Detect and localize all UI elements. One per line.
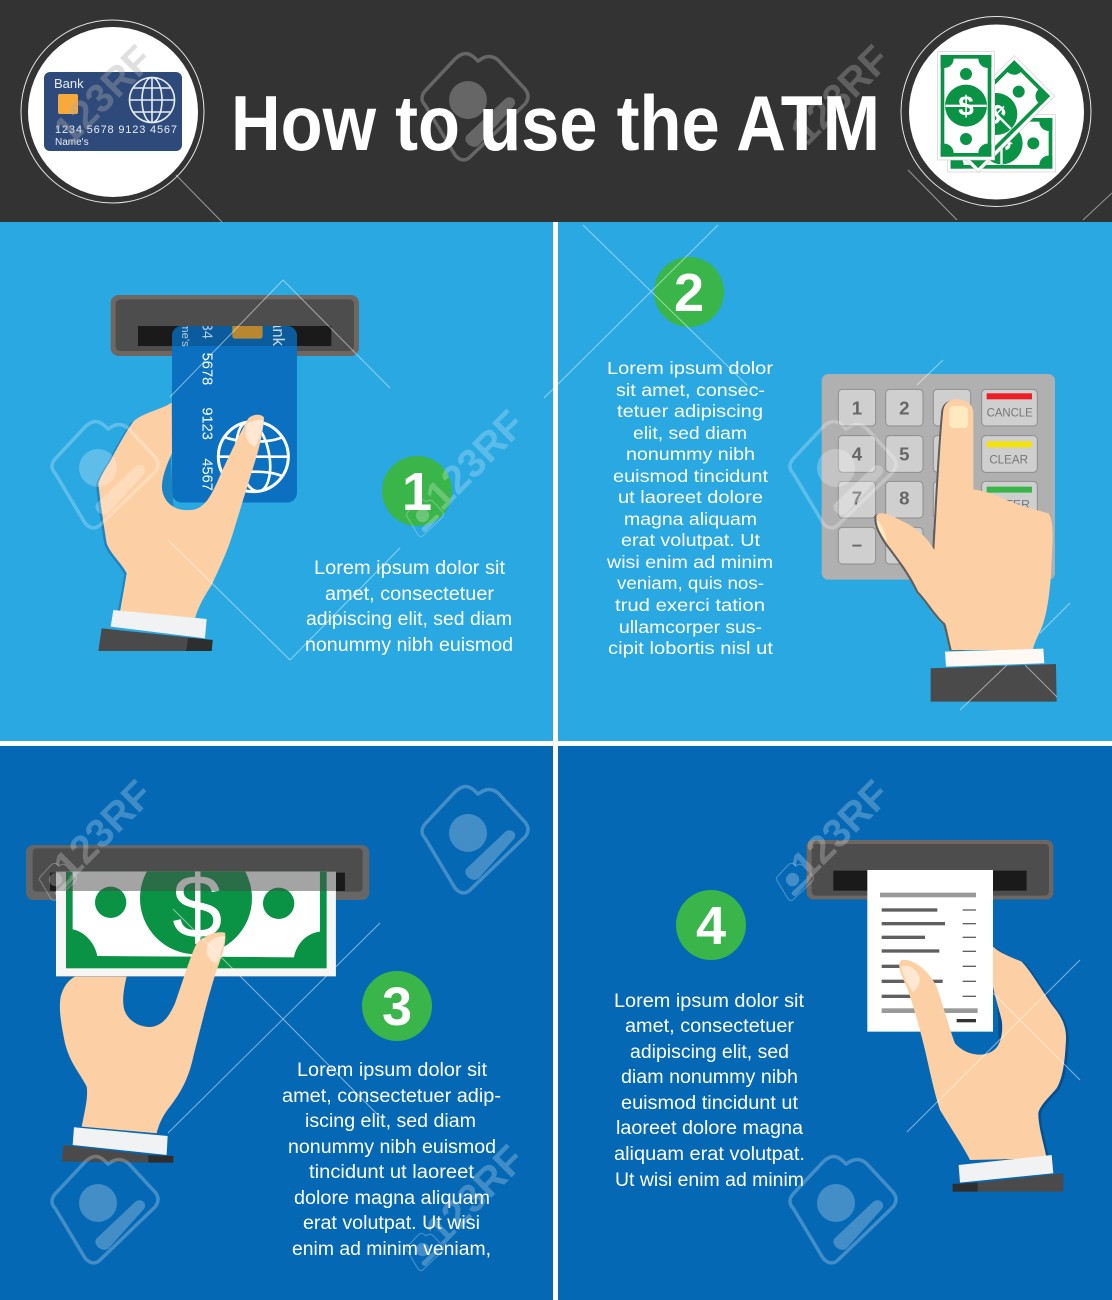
- step 2 text: Lorem ipsum dolor: [607, 358, 773, 378]
- step 4 text: adipiscing elit, sed: [630, 1042, 789, 1063]
- step 3 text: enim ad minim veniam,: [292, 1239, 491, 1260]
- step 1 text: Lorem ipsum dolor sit: [314, 558, 506, 579]
- step 2 text: veniam, quis nos-: [617, 573, 764, 593]
- step 2 text: nonummy nibh: [626, 444, 755, 464]
- step 1 number badge: 1: [402, 462, 432, 522]
- icon: credit card badge: [21, 20, 204, 203]
- step 2 text: elit, sed diam: [633, 423, 747, 443]
- watermark: header left 123RF: 123RF: [45, 37, 161, 153]
- step 3 text: amet, consectetuer adip-: [282, 1086, 501, 1107]
- step 2 illustration: keypad and pressing hand: 1: [852, 397, 862, 418]
- step 3 text: tincidunt ut laoreet: [309, 1162, 475, 1183]
- step 2 illustration: keypad and pressing hand: CANCLE: [987, 406, 1033, 420]
- step 4 text: diam nonummy nibh: [621, 1067, 798, 1088]
- step 4 text: Lorem ipsum dolor sit: [614, 991, 805, 1012]
- watermark overlay logos and text: 123RF: [782, 772, 898, 888]
- step 2 illustration: keypad and pressing hand: ENTER: [988, 497, 1030, 511]
- panel: step 3: [0, 746, 553, 1300]
- step 3 text: iscing elit, sed diam: [305, 1111, 476, 1132]
- step 4 text: aliquam erat volutpat.: [614, 1144, 805, 1165]
- watermark overlay logos and text: 123RF: [417, 402, 533, 518]
- step 2 text: [606, 358, 773, 658]
- step 2 text: wisi enim ad minim: [606, 552, 773, 572]
- step 2 text: ut laoreet dolore: [618, 487, 763, 507]
- step 2 illustration: keypad and pressing hand: 5: [899, 443, 910, 464]
- step 3 text: nonummy nibh euismod: [288, 1137, 496, 1158]
- step 1 illustration: card into slot: [96, 295, 359, 651]
- step 1 illustration: card into slot: Bank: [269, 308, 288, 347]
- step 2 illustration: keypad and pressing hand: 7: [852, 487, 862, 508]
- watermark: header logo: [422, 54, 528, 160]
- step 2 illustration: keypad and pressing hand: [822, 374, 1057, 702]
- step 1 illustration: card into slot: 5678: [198, 353, 214, 385]
- step 3 text: [282, 1060, 501, 1260]
- watermark overlay logos and text: 123RF: [417, 1137, 533, 1253]
- header bar: [0, 0, 1112, 222]
- step 2 illustration: keypad and pressing hand: 2: [899, 397, 910, 418]
- step 3 illustration: banknote from slot: $: [172, 857, 222, 957]
- step 1 text: adipiscing elit, sed diam: [306, 609, 512, 630]
- step 4 text: amet, consectetuer: [625, 1016, 795, 1037]
- step 4 number badge: [676, 890, 746, 960]
- step 2 text: tetuer adipiscing: [617, 401, 763, 421]
- step 1 illustration: card into slot: 34: [198, 323, 214, 339]
- icon: banknotes badge: [901, 16, 1091, 206]
- icon: credit card badge: 1234 5678 9123 4567: [55, 124, 177, 136]
- step 4 text: [614, 991, 805, 1191]
- step 4 text: Ut wisi enim ad minim: [615, 1170, 804, 1191]
- panel: step 1: [0, 222, 553, 741]
- step 2 illustration: keypad and pressing hand: 4: [852, 443, 863, 464]
- step 1 number badge: [382, 456, 452, 526]
- step 1 text: amet, consectetuer: [325, 584, 495, 605]
- step 2 text: euismod tincidunt: [613, 466, 768, 486]
- step 1 illustration: card into slot: 4567: [198, 458, 214, 491]
- step 3 text: erat volutpat. Ut wisi: [303, 1213, 480, 1234]
- step 2 number badge: [654, 257, 724, 327]
- step 4 text: laoreet dolore magna: [616, 1118, 803, 1139]
- panel: step 4: [558, 746, 1112, 1300]
- icon: credit card badge: Bank: [54, 76, 84, 91]
- panel: step 2: [558, 222, 1112, 741]
- watermark overlay logos and text: 123RF: [45, 772, 161, 888]
- step 2 text: ullamcorper sus-: [619, 617, 762, 637]
- step 2 illustration: keypad and pressing hand: 8: [899, 487, 910, 508]
- step 2 text: sit amet, consec-: [616, 380, 765, 400]
- step 2 text: magna aliquam: [624, 509, 757, 529]
- step 1 illustration: card into slot: Name's: [179, 309, 191, 347]
- step 2 illustration: keypad and pressing hand: –: [852, 534, 862, 555]
- step 3 text: Lorem ipsum dolor sit: [297, 1060, 488, 1081]
- step 2 text: erat volutpat. Ut: [621, 530, 760, 550]
- watermark: header right 123RF: 123RF: [782, 37, 898, 153]
- step 2 text: trud exerci tation: [615, 595, 765, 615]
- step 1 illustration: card into slot: 9123: [198, 407, 214, 440]
- step 1 text: [305, 558, 513, 656]
- step 2 text: cipit lobortis nisl ut: [608, 638, 773, 658]
- step 3 illustration: banknote from slot: [26, 842, 369, 1163]
- step 3 number badge: [362, 971, 432, 1041]
- icon: credit card badge: Name's: [55, 137, 89, 148]
- step 3 text: dolore magna aliquam: [294, 1188, 490, 1209]
- step 1 text: nonummy nibh euismod: [305, 635, 513, 656]
- step 2 number badge: 2: [674, 263, 704, 323]
- step 4 number badge: 4: [696, 896, 726, 956]
- title: How to use the ATM: [231, 79, 880, 167]
- step 4 text: euismod tincidunt ut: [621, 1093, 799, 1114]
- step 2 illustration: keypad and pressing hand: CLEAR: [989, 453, 1028, 467]
- step 3 number badge: 3: [382, 977, 412, 1037]
- step 4 illustration: receipt from slot: [807, 840, 1069, 1192]
